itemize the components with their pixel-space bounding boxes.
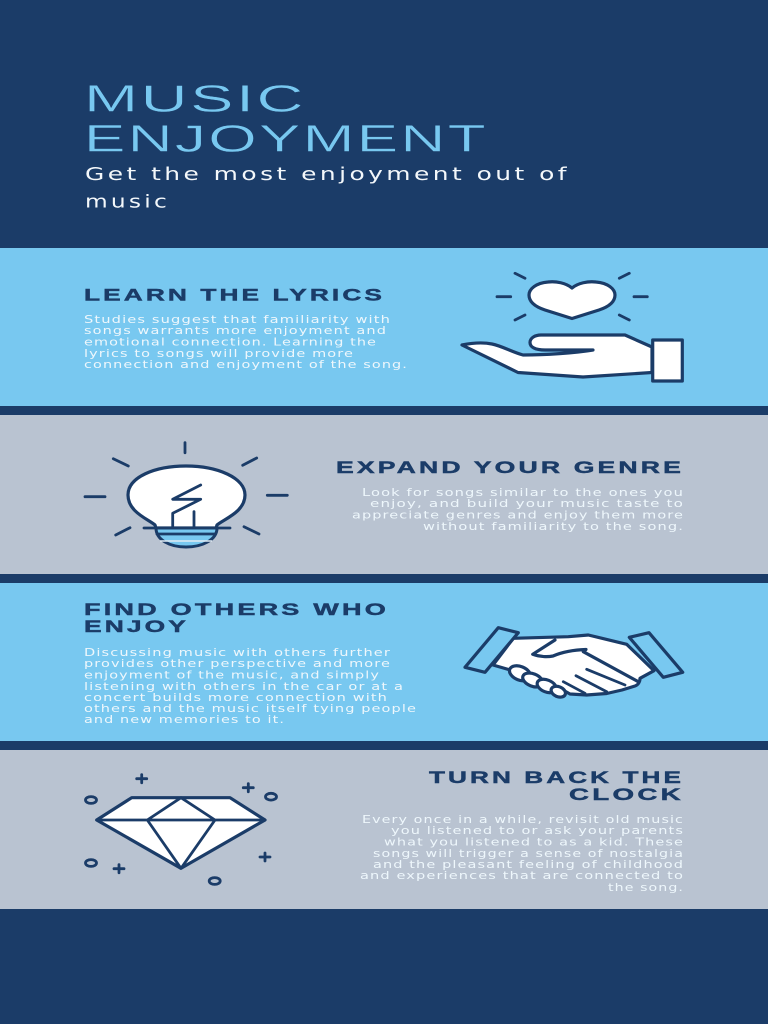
icon: light bulb [85, 443, 287, 547]
heading: find others who enjoy: FIND OTHERS WHO [84, 600, 389, 619]
subtitle [85, 164, 570, 212]
text block: learn the lyrics: lyrics to songs will provide more [84, 348, 354, 360]
text block: expand your genre: Look for songs similar to the ones you [362, 487, 684, 499]
heading: turn back the clock [429, 768, 684, 804]
heading: expand your genre: EXPAND YOUR GENRE [336, 458, 684, 477]
text block: learn the lyrics: emotional connection. Learning the [84, 336, 377, 348]
text block: expand your genre: without familiarity to the song. [423, 521, 684, 533]
panel: learn the lyrics [0, 248, 768, 406]
text block: expand your genre: enjoy, and build your music taste to [370, 498, 684, 510]
text block: find others who enjoy: provides other perspective and more [84, 658, 391, 670]
panel: find others who enjoy [0, 583, 768, 741]
heading: find others who enjoy: ENJOY [84, 617, 189, 636]
text block: learn the lyrics: connection and enjoyment of the song. [84, 359, 408, 371]
subtitle: music [85, 192, 170, 212]
panel: turn back the clock [0, 750, 768, 909]
panel: expand your genre [0, 415, 768, 574]
heading: learn the lyrics: LEARN THE LYRICS [84, 286, 385, 304]
text block: find others who enjoy: others and the music itself tying people [84, 703, 417, 715]
icon: diamond [86, 775, 276, 884]
text block: turn back the clock: you listened to or ask your parents [391, 825, 684, 837]
text block: find others who enjoy: Discussing music with others further [84, 647, 391, 659]
text block: learn the lyrics [84, 314, 408, 371]
title: ENJOYMENT [84, 118, 488, 160]
text block: find others who enjoy [84, 647, 417, 726]
text block: expand your genre [352, 487, 684, 533]
icon: handshake [465, 628, 683, 699]
text block: turn back the clock: what you listened to as a kid. These [384, 836, 684, 848]
heading: find others who enjoy [84, 600, 389, 636]
text block: turn back the clock: songs will trigger a sense of nostalgia [373, 848, 684, 860]
text block: turn back the clock: Every once in a while, revisit old music [362, 814, 684, 826]
heading: turn back the clock: TURN BACK THE [429, 768, 684, 787]
title: MUSIC [84, 78, 306, 120]
subtitle: Get the most enjoyment out of [85, 164, 570, 185]
text block: turn back the clock: and the pleasant feeling of childhood [373, 859, 684, 871]
text block: turn back the clock: the song. [608, 882, 684, 894]
text block: find others who enjoy: enjoyment of the music, and simply [84, 670, 380, 682]
text block: learn the lyrics: Studies suggest that familiarity with [84, 314, 391, 326]
text block: find others who enjoy: listening with others in the car or at a [84, 681, 404, 693]
icon: hand holding heart [462, 273, 682, 381]
title [84, 78, 488, 160]
text block: find others who enjoy: concert builds more connection with [84, 692, 388, 704]
heading: turn back the clock: CLOCK [569, 785, 684, 804]
text block: turn back the clock: and experiences that are connected to [360, 870, 684, 882]
text block: turn back the clock [360, 814, 684, 894]
text block: expand your genre: appreciate genres and enjoy them more [352, 510, 684, 522]
text block: learn the lyrics: songs warrants more enjoyment and [84, 325, 387, 337]
text block: find others who enjoy: and new memories to it. [84, 714, 285, 726]
